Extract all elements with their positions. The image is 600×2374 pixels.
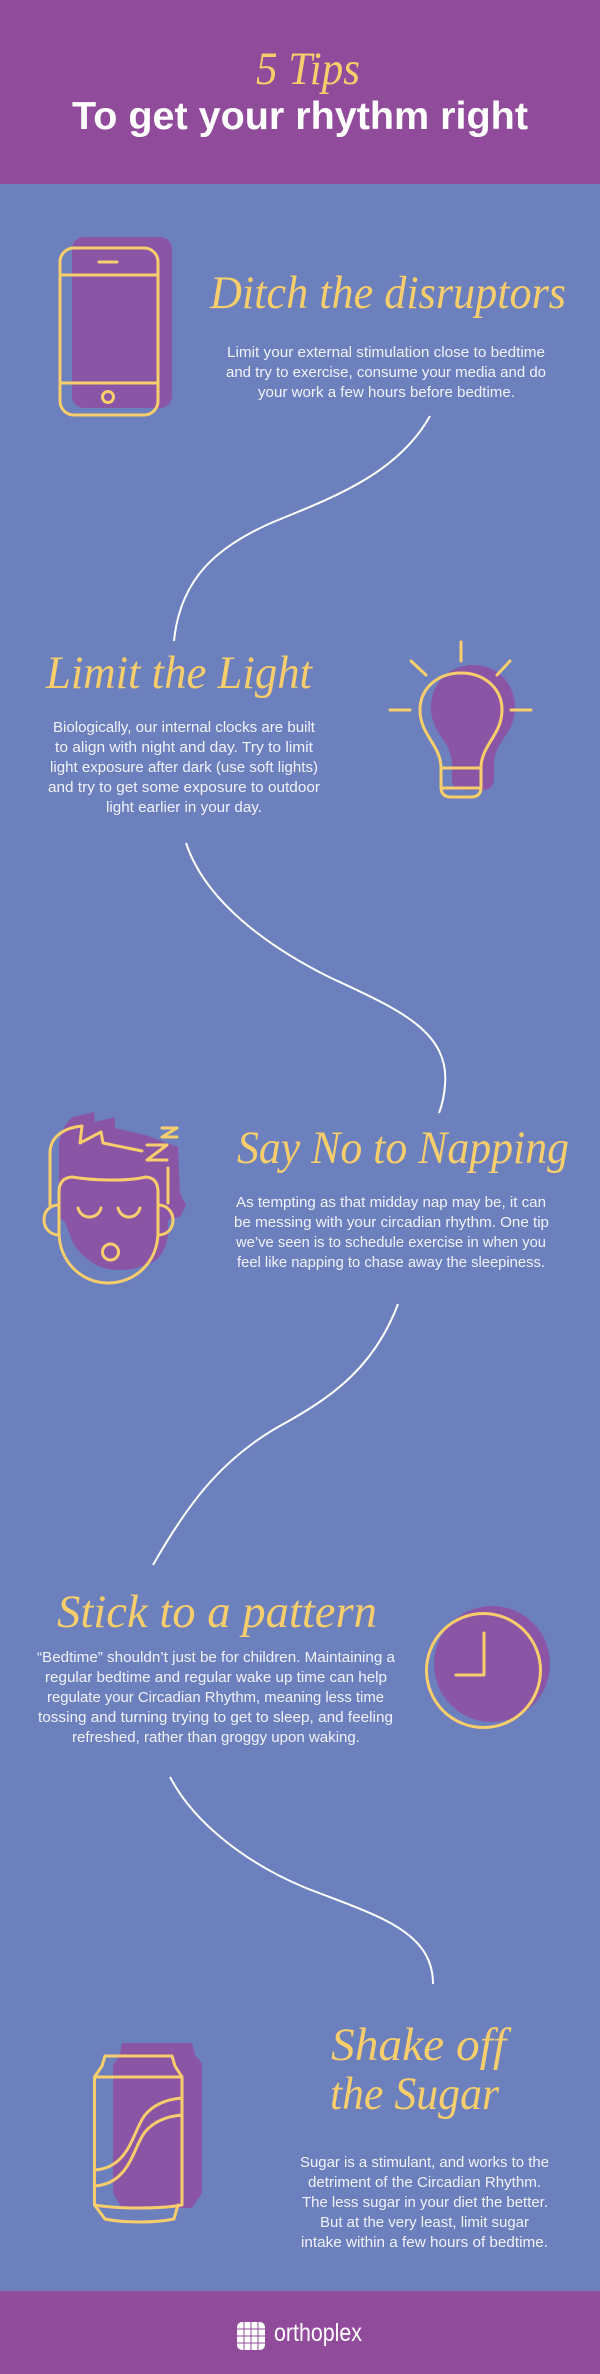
heading: shake off the sugar: the Sugar <box>330 2068 500 2120</box>
footer banner <box>0 2291 600 2374</box>
heading: limit the light: Limit the Light <box>45 647 313 699</box>
text block: tip 3 body <box>234 1194 549 1271</box>
text block: tip 2 body: light exposure after dark (use soft lights) <box>50 759 318 776</box>
icon: orthoplex logo grid <box>237 2322 265 2350</box>
text block: tip 1 body: and try to exercise, consume your media and do <box>226 364 546 381</box>
text block: tip 4 body <box>37 1649 396 1746</box>
tip 2: limit the light <box>45 642 531 816</box>
text block: tip 4 body: regulate your Circadian Rhythm, meaning less time <box>47 1689 384 1706</box>
text block: tip 3 body: we’ve seen is to schedule exercise in when you <box>235 1234 546 1251</box>
text block: tip 4 body: “Bedtime” shouldn’t just be for children. Maintaining a <box>37 1649 396 1666</box>
icon: sleeping face <box>44 1112 186 1283</box>
text block: tip 4 body: refreshed, rather than groggy upon waking. <box>72 1729 360 1746</box>
text block: tip 1 body: your work a few hours before bedtime. <box>258 384 515 401</box>
tip 4: stick to a pattern <box>37 1586 550 1746</box>
text block: tip 3 body: As tempting as that midday nap may be, it can <box>236 1194 546 1211</box>
icon: smartphone <box>60 237 172 415</box>
connector curve 3 <box>153 1304 398 1565</box>
subtitle: 5 Tips: 5 Tips <box>256 43 360 95</box>
tip 3: say no to napping <box>44 1112 569 1283</box>
connector curve 4 <box>170 1777 433 1984</box>
text block: tip 5 body <box>300 2154 549 2251</box>
heading: shake off the sugar <box>330 2019 512 2120</box>
main title: To get your rhythm right <box>72 95 528 138</box>
text block: tip 5 body: The less sugar in your diet the better. <box>302 2194 548 2211</box>
heading: stick to a pattern: Stick to a pattern <box>57 1586 377 1638</box>
text block: tip 2 body <box>48 719 320 816</box>
tip 5: shake off the sugar <box>94 2019 549 2251</box>
text block: tip 5 body: But at the very least, limit sugar <box>320 2214 529 2231</box>
connector curve 1 <box>174 416 430 641</box>
text block: tip 1 body <box>226 344 546 401</box>
heading: say no to napping: Say No to Napping <box>237 1122 569 1174</box>
icon: clock <box>426 1606 550 1728</box>
connector curve 2 <box>186 843 445 1113</box>
tip 1: ditch the disruptors <box>60 237 566 415</box>
text block: tip 2 body: to align with night and day. Try to limit <box>55 739 314 756</box>
heading: ditch the disruptors: Ditch the disruptors <box>209 267 566 319</box>
text block: tip 4 body: tossing and turning trying to get to sleep, and feeling <box>38 1709 393 1726</box>
text block: tip 2 body: and try to get some exposure to outdoor <box>48 779 320 796</box>
text block: tip 2 body: light earlier in your day. <box>106 799 262 816</box>
text block: tip 1 body: Limit your external stimulation close to bedtime <box>227 344 545 361</box>
brand name: orthoplex <box>274 2319 362 2347</box>
text block: tip 5 body: Sugar is a stimulant, and works to the <box>300 2154 549 2171</box>
text block: tip 4 body: regular bedtime and regular wake up time can help <box>45 1669 387 1686</box>
text block: tip 3 body: be messing with your circadian rhythm. One tip <box>234 1214 549 1231</box>
icon: light bulb <box>390 642 531 797</box>
heading: shake off the sugar: Shake off <box>331 2019 512 2071</box>
text block: tip 5 body: intake within a few hours of bedtime. <box>301 2234 548 2251</box>
text block: tip 3 body: feel like napping to chase away the sleepiness. <box>237 1254 545 1271</box>
text block: tip 5 body: detriment of the Circadian Rhythm. <box>308 2174 541 2191</box>
text block: tip 2 body: Biologically, our internal clocks are built <box>53 719 316 736</box>
header banner <box>0 0 600 184</box>
icon: soda can <box>94 2043 202 2222</box>
